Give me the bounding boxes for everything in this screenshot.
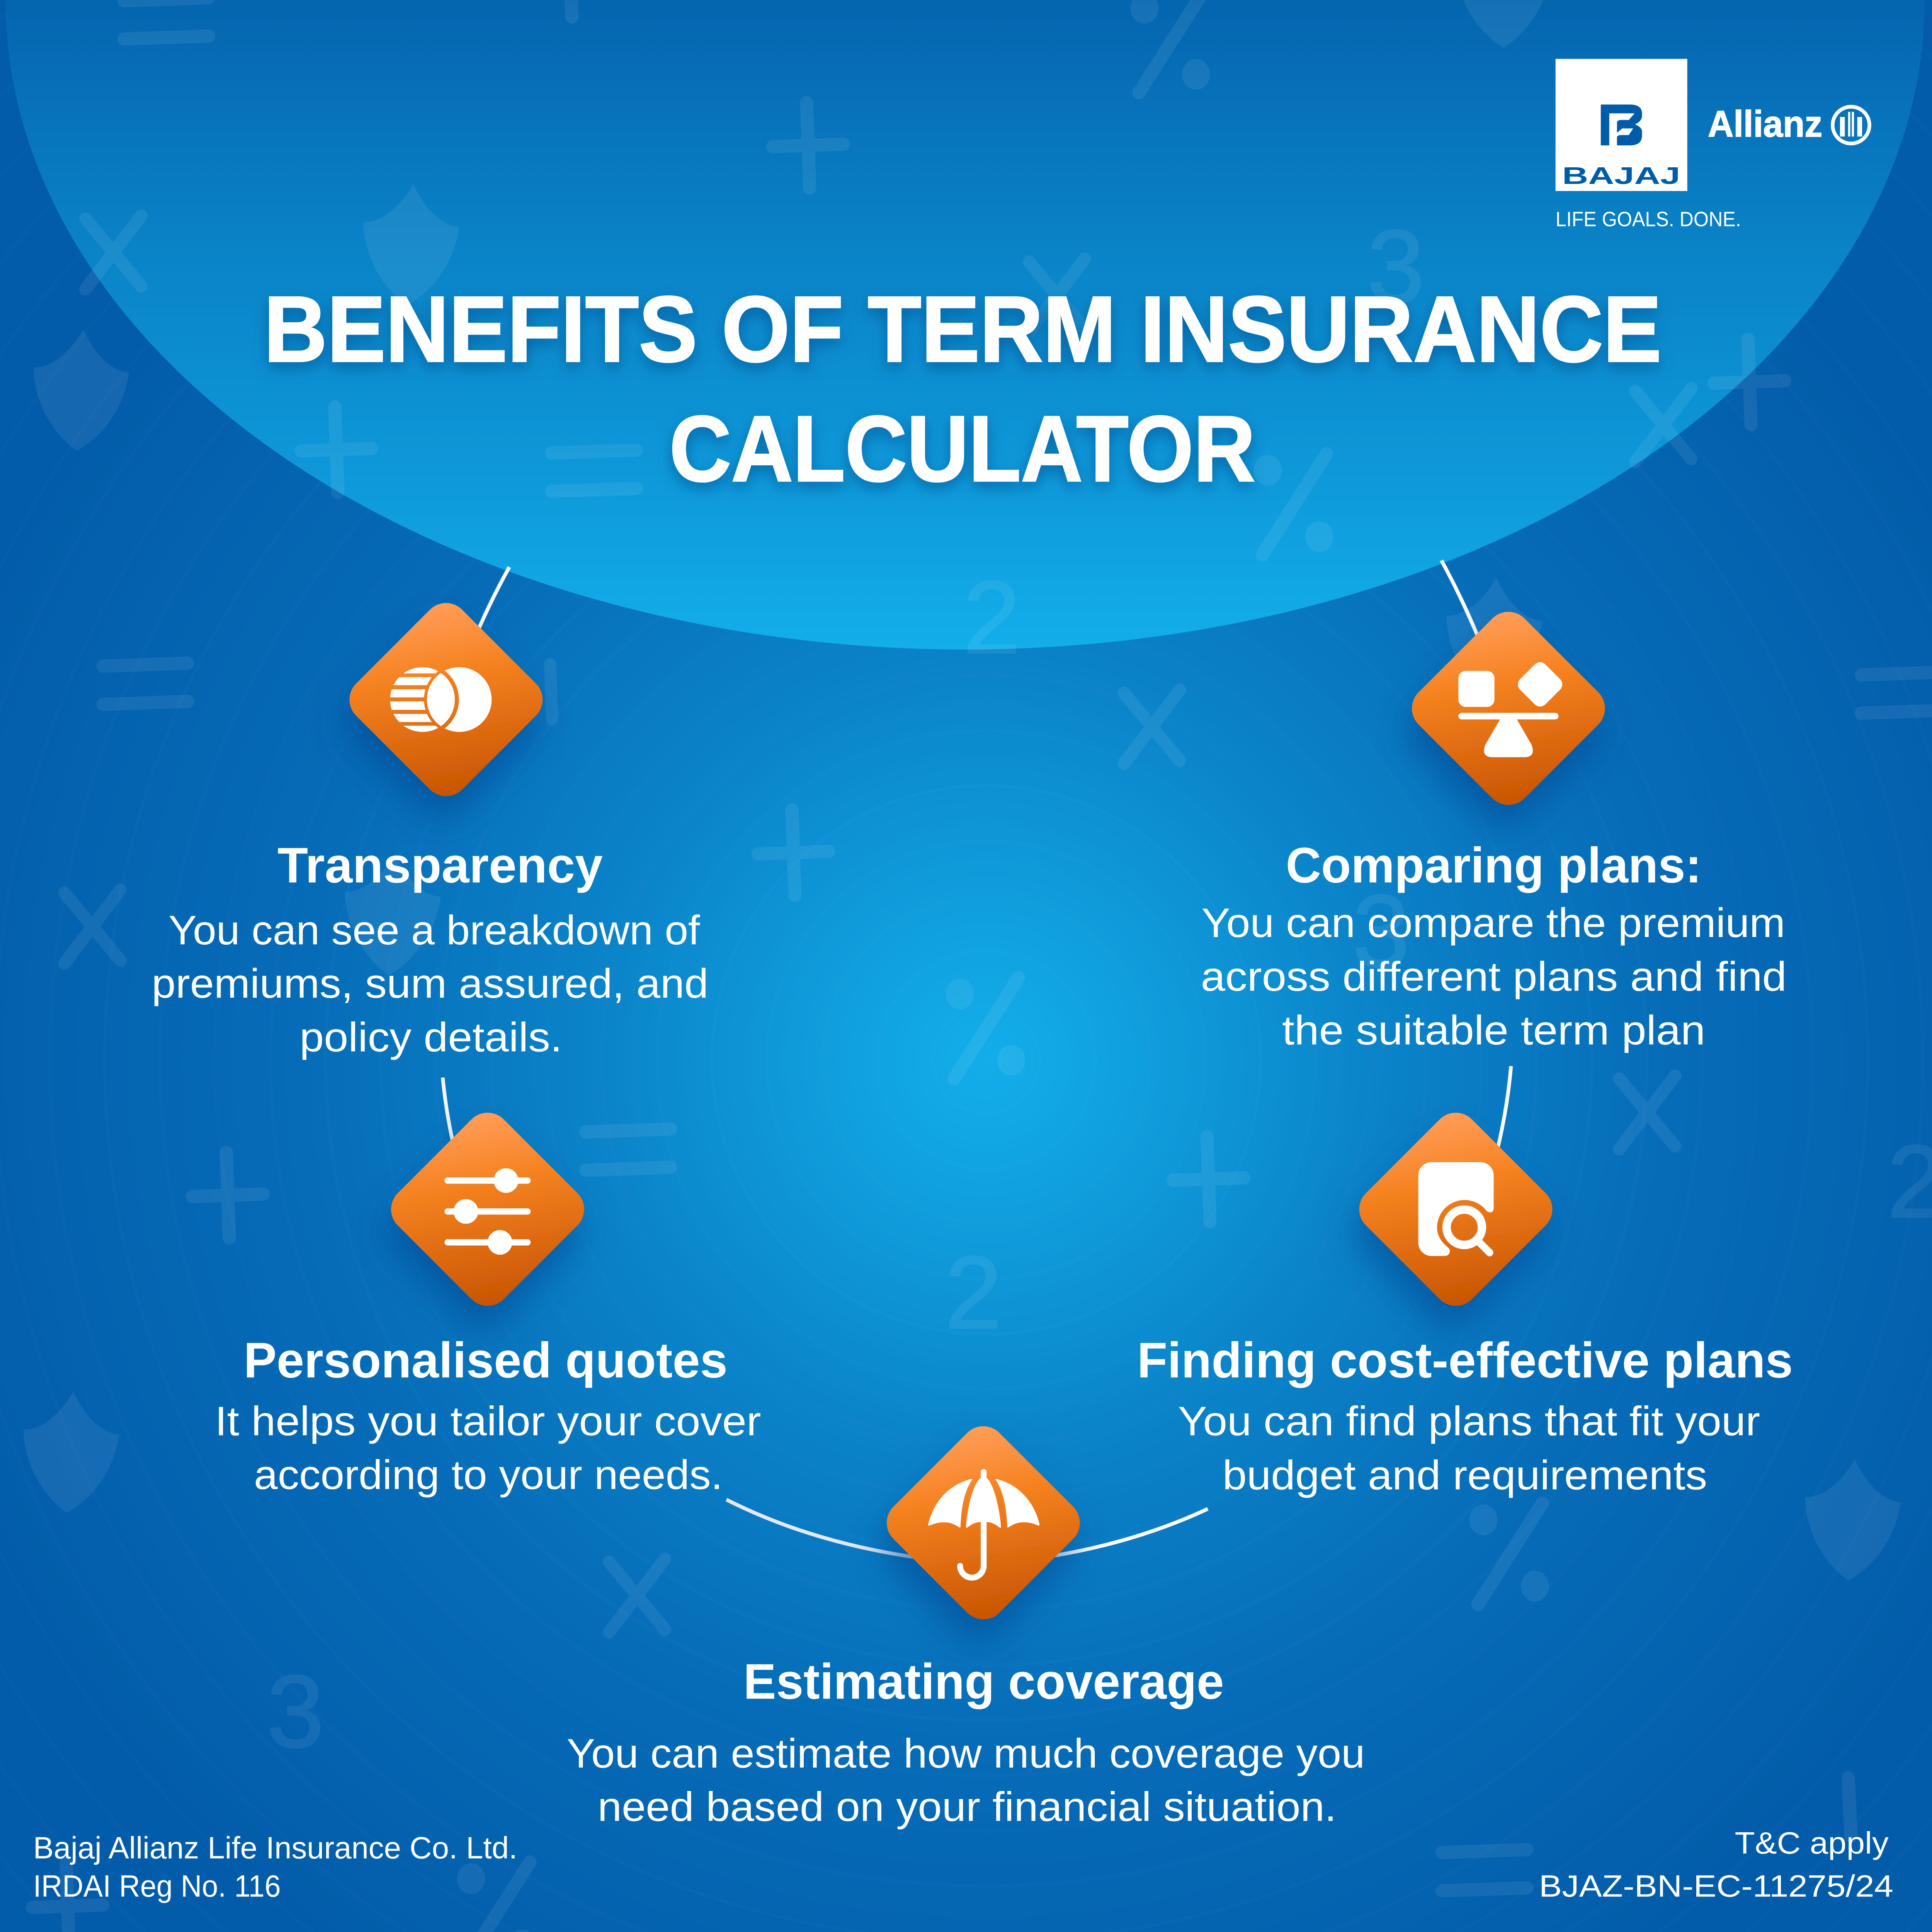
footer: terms and reference code: BJAZ-BN-EC-11275/24: [1539, 1869, 1893, 1903]
body: finding cost-effective plans: You can find plans that fit your: [1178, 1398, 1760, 1444]
title: [239, 269, 1693, 526]
heading: transparency: Transparency: [277, 838, 603, 893]
body: transparency: premiums, sum assured, and: [151, 960, 708, 1007]
text: estimating coverage: [560, 1652, 1372, 1836]
footer: company registration: [26, 1829, 526, 1910]
logo: Allianz wordmark: Allianz: [1708, 104, 1822, 145]
logo: BF monogram: [1601, 104, 1642, 145]
background math symbols: 2: [963, 560, 1020, 675]
icon: transparency diamond: [343, 603, 543, 824]
footer: terms and reference code: [1534, 1825, 1899, 1910]
body: comparing plans: [1201, 900, 1787, 1053]
body: comparing plans: across different plans and find: [1201, 953, 1787, 1000]
body: finding cost-effective plans: budget and requirements: [1223, 1452, 1707, 1498]
footer: company registration: IRDAI Reg No. 116: [33, 1869, 281, 1903]
heading: personalised quotes: Personalised quotes: [243, 1333, 728, 1388]
icon: personalised quotes diamond: [304, 1025, 672, 1393]
logo: Bajaj wordmark: BAJAJ: [1562, 163, 1680, 189]
text: comparing plans: [1192, 835, 1796, 1063]
connector: header to comparing plans: [1435, 552, 1487, 644]
connector: header to transparency: [471, 560, 519, 637]
body: comparing plans: You can compare the premium: [1202, 900, 1785, 946]
text: transparency: [147, 835, 718, 1071]
icon: finding plans diamond: [1272, 1025, 1640, 1393]
heading: comparing plans: Comparing plans:: [1286, 838, 1702, 893]
text: finding cost-effective plans: [1133, 1330, 1799, 1507]
icon: estimating coverage diamond: [799, 1339, 1167, 1707]
body: comparing plans: the suitable term plan: [1282, 1007, 1705, 1053]
body: transparency: You can see a breakdown of: [168, 907, 700, 953]
body: transparency: [151, 907, 708, 1060]
background math symbols: 3: [1367, 209, 1424, 324]
heading: finding cost-effective plans: Finding cost-effective plans: [1137, 1333, 1793, 1388]
logo: Allianz emblem: [1833, 107, 1869, 143]
body: estimating coverage: [567, 1730, 1365, 1830]
body: personalised quotes: [215, 1398, 761, 1498]
connector: finding plans to estimating coverage: [1049, 1505, 1211, 1560]
background math symbols: 3: [1352, 874, 1410, 989]
logo: Bajaj Allianz: [1546, 51, 1884, 236]
background math symbols: 3: [267, 1654, 324, 1769]
body: personalised quotes: according to your needs.: [254, 1451, 723, 1498]
logo: tagline: LIFE GOALS. DONE.: [1556, 208, 1741, 231]
title: CALCULATOR: [669, 397, 1255, 501]
footer: terms and reference code: T&C apply: [1735, 1826, 1889, 1860]
connector: comparing plans to finding plans: [1490, 1063, 1516, 1152]
background math symbols: 2: [945, 1235, 1002, 1350]
body: transparency: policy details.: [299, 1014, 562, 1060]
icon: comparing plans diamond: [1325, 524, 1692, 893]
heading: estimating coverage: Estimating coverage: [743, 1654, 1224, 1709]
connector: personalised quotes to estimating coverage: [721, 1494, 920, 1564]
header dome: [5, 0, 1925, 650]
body: finding cost-effective plans: [1178, 1398, 1760, 1498]
body: estimating coverage: You can estimate how much coverage you: [567, 1730, 1365, 1776]
footer: company registration: Bajaj Allianz Life Insurance Co. Ltd.: [33, 1831, 517, 1865]
connector: transparency to personalised quotes: [438, 1075, 460, 1145]
body: estimating coverage: need based on your financial situation.: [598, 1783, 1337, 1830]
body: personalised quotes: It helps you tailor your cover: [215, 1398, 761, 1444]
text: personalised quotes: [210, 1330, 769, 1507]
logo: Bajaj white tile: [1556, 59, 1687, 191]
